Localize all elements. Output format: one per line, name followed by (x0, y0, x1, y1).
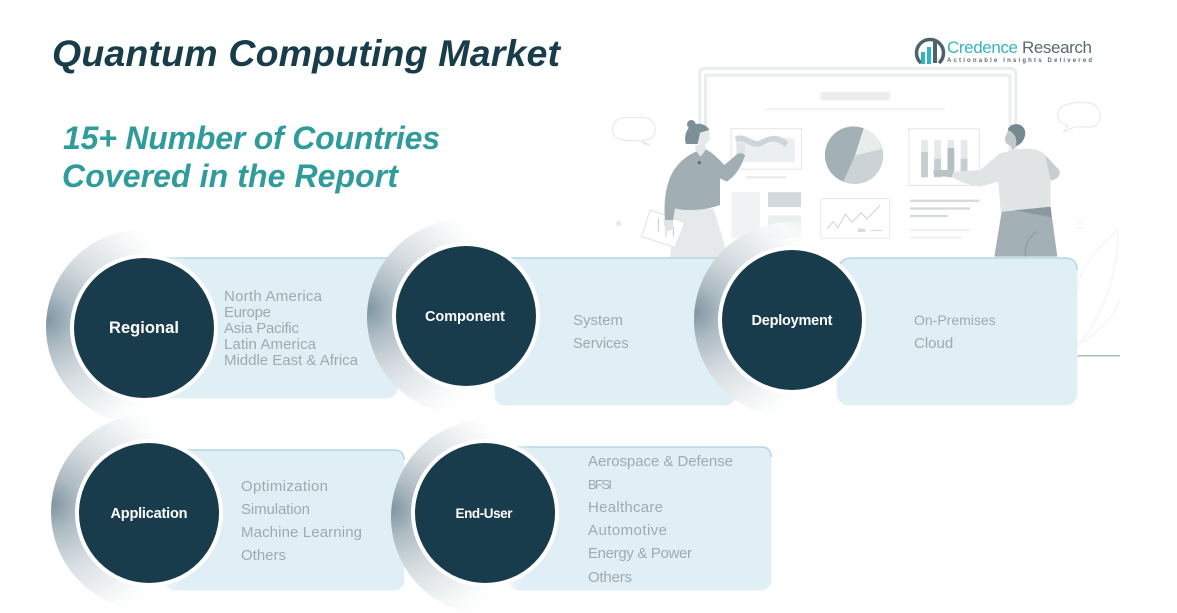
circle badge: End-User (391, 419, 587, 613)
bar chart card (909, 129, 979, 185)
circle badge: Application (51, 414, 247, 610)
layout blocks (731, 192, 801, 238)
line chart card (820, 199, 890, 238)
logo wordmark: Credence Research (947, 38, 1092, 57)
circle badge: Regional (46, 229, 242, 425)
subtitle: 15+ Number of Countries (63, 120, 440, 156)
End-User items: Automotive (588, 522, 667, 539)
leaf (1078, 230, 1120, 345)
Application items: Simulation (241, 501, 310, 518)
Application items: Optimization (241, 478, 328, 495)
Deployment items: On-Premises (914, 312, 996, 328)
subtitle: Covered in the Report (62, 158, 399, 194)
End-User items: BFSI (588, 477, 612, 492)
Deployment items: Cloud (914, 335, 953, 352)
area chart card (731, 129, 801, 178)
Regional items: Latin America (224, 336, 317, 353)
board frame (700, 68, 1016, 259)
Regional items: North America (224, 288, 323, 305)
logo: Credence Research (917, 38, 1092, 64)
title: Quantum Computing Market (52, 32, 562, 74)
End-User items: Aerospace & Defense (588, 453, 733, 470)
pie chart (825, 126, 883, 184)
circle badge: Deployment (694, 222, 890, 418)
circle badge: End-User: End-User (456, 506, 513, 521)
circle badge: Component: Component (425, 309, 505, 325)
circle badge: Deployment: Deployment (752, 313, 833, 329)
End-User items: Others (588, 569, 632, 586)
Component items: Services (573, 336, 629, 352)
ground line (1077, 355, 1120, 356)
Regional items: Europe (224, 304, 271, 321)
illustration: two presenters at a dashboard board (613, 68, 1120, 356)
man presenter (933, 124, 1060, 257)
Regional items: Middle East & Africa (224, 352, 359, 369)
logo icon (917, 39, 944, 64)
panel: Deployment (837, 258, 1077, 405)
circle badge: Regional: Regional (109, 319, 179, 337)
Regional items (224, 288, 359, 369)
End-User items: Energy & Power (588, 545, 692, 562)
woman presenter (642, 120, 745, 258)
logo tagline: Actionable Insights Delivered (947, 58, 1092, 64)
Application items: Others (241, 547, 286, 564)
panel: Regional (160, 258, 397, 398)
decorative dots (616, 221, 621, 226)
panel: Application (165, 450, 404, 590)
speech bubble right (1058, 103, 1100, 132)
subtitle (62, 120, 440, 194)
End-User items: Healthcare (588, 499, 663, 516)
speech bubble left (613, 117, 655, 146)
panel: Component (495, 258, 735, 405)
Regional items: Asia Pacific (224, 320, 300, 337)
circle badge: Application: Application (110, 506, 188, 522)
panel: End-User (510, 447, 771, 590)
text lines (910, 200, 979, 238)
circle badge: Component (367, 219, 563, 415)
Application items (241, 478, 362, 564)
Application items: Machine Learning (241, 524, 362, 541)
Component items: System (573, 312, 623, 329)
End-User items (588, 453, 733, 586)
Deployment items (914, 312, 996, 352)
Component items (573, 312, 629, 352)
